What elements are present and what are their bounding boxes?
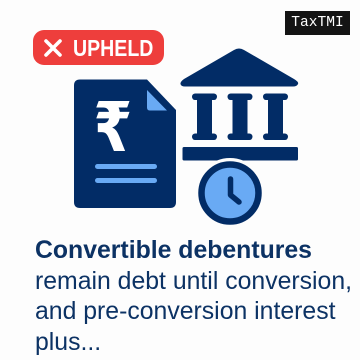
body line 2: and pre-conversion interest <box>35 298 335 325</box>
heading line: Convertible debentures <box>35 237 312 264</box>
icon: cross <box>44 39 62 57</box>
icon: bank building <box>180 48 298 160</box>
body line 3: plus... <box>35 329 101 356</box>
icon: clock <box>195 158 265 228</box>
badge label: UPHELD <box>73 35 153 61</box>
rupee symbol: ₹ <box>94 87 132 167</box>
text block: headline <box>35 237 352 356</box>
badge: upheld <box>33 30 164 65</box>
watermark: TaxTMI: TaxTMI <box>291 15 344 31</box>
watermark: TaxTMI <box>285 11 350 35</box>
body line 1: remain debt until conversion, <box>35 268 352 295</box>
illustration: document, bank and clock <box>74 48 298 225</box>
icon: rupee document <box>74 80 176 208</box>
